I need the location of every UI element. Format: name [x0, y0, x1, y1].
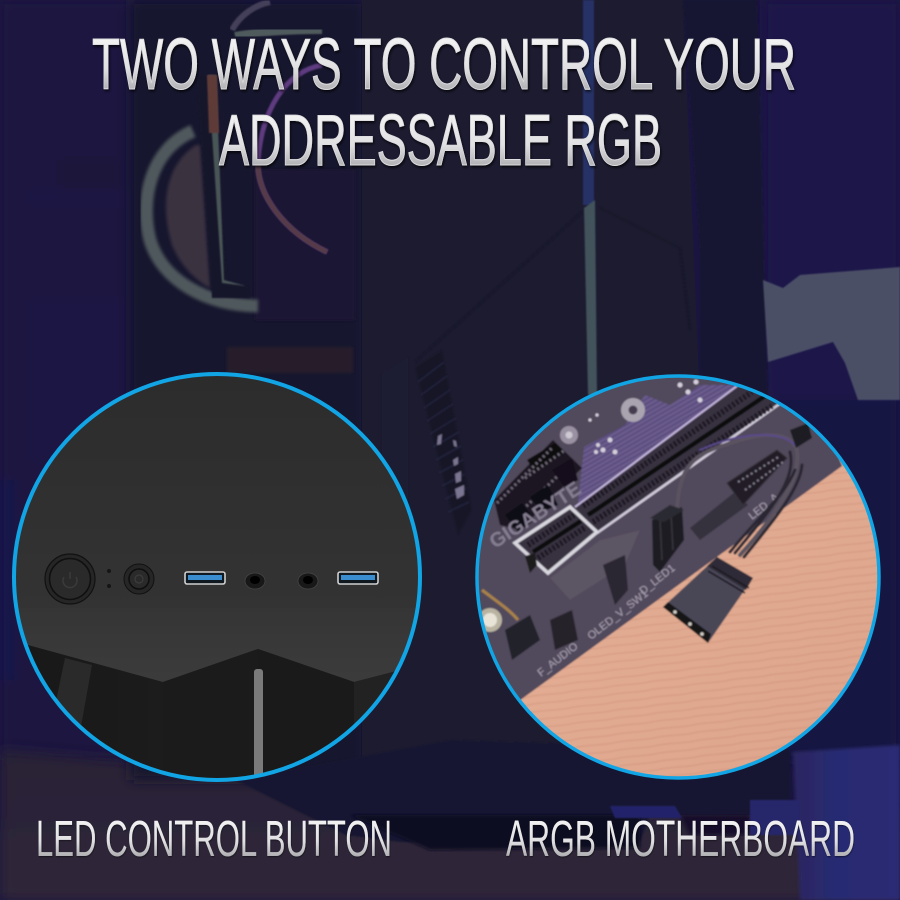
title	[92, 25, 796, 181]
RGB light strip on tower	[583, 0, 594, 205]
long PCIe slot	[575, 386, 785, 533]
short PCIe slot	[515, 507, 597, 573]
grey window on right wall	[763, 267, 900, 400]
front fascia	[28, 645, 163, 770]
wood grain	[525, 474, 876, 774]
silkscreen labels: D_LED1	[637, 562, 678, 597]
chamfered edge	[18, 610, 416, 682]
mounting hole	[621, 398, 645, 422]
audio jack right	[298, 573, 318, 589]
top-right header	[790, 423, 812, 448]
case top surface	[10, 370, 425, 610]
silkscreen labels: LED_A	[746, 491, 782, 522]
cable loop	[677, 435, 802, 557]
silkscreen labels	[486, 478, 782, 679]
fan top highlights	[232, 2, 270, 30]
tower base and floor shadow	[235, 740, 790, 842]
ARGB connector	[663, 557, 753, 643]
front light bar	[254, 669, 263, 779]
rear vent	[415, 350, 472, 535]
silkscreen labels: OLED_V_SW1	[585, 588, 651, 642]
black PCIe x1 slots top left	[494, 440, 582, 532]
panel: ARGB motherboard photo	[470, 360, 885, 785]
small screw	[560, 426, 578, 444]
fan arc: grey	[146, 131, 258, 306]
wooden desk	[520, 458, 878, 776]
floor	[0, 750, 900, 900]
power button	[45, 554, 95, 604]
front audio header	[505, 615, 540, 660]
motherboard PCB	[478, 378, 842, 700]
jumper pins	[603, 555, 628, 605]
panel: LED control button photo	[10, 370, 425, 790]
small fan header	[550, 610, 578, 650]
silkscreen labels: GIGABYTE	[486, 478, 585, 553]
pin block	[690, 492, 748, 540]
LED indicators	[107, 569, 111, 588]
blue ring right	[477, 376, 879, 778]
USB header socket	[727, 450, 787, 505]
gold capacitor	[478, 590, 518, 632]
glass side panel	[130, 0, 365, 780]
audio jack left	[245, 573, 265, 589]
USB port left	[185, 572, 225, 584]
blue ring left	[14, 374, 420, 780]
USB port right	[338, 572, 378, 584]
solder dots	[588, 380, 702, 454]
fan bracket	[197, 75, 250, 298]
hatched copper area	[578, 385, 737, 503]
3-pin header plug	[650, 505, 684, 572]
translucent clear bump	[550, 530, 640, 600]
LED control button	[124, 564, 154, 594]
blue blocks bottom right	[793, 745, 900, 900]
fan arc: purple	[258, 65, 327, 252]
tower body	[362, 0, 700, 810]
silkscreen labels: F_AUDIO	[535, 640, 581, 679]
label: LED control button: LED CONTROL BUTTON	[36, 810, 392, 867]
